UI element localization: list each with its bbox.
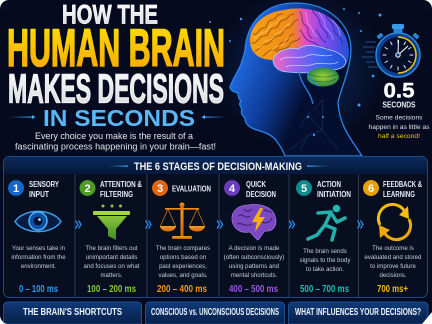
- stat note: happen in as little as: [368, 124, 430, 131]
- icon: brain with lightning bolt: [232, 204, 276, 240]
- stage 3: evaluation: [152, 180, 211, 295]
- stage 6: feedback and learning: evaluated and stored: [365, 254, 421, 261]
- stage 1: sensory input: SENSORY: [29, 179, 59, 189]
- stage 6: feedback and learning: LEARNING: [383, 189, 415, 199]
- brain temporal lobe: [273, 45, 346, 73]
- stage 2: attention and filtering: The brain filters out: [85, 245, 138, 252]
- stage 1: sensory input: environment.: [21, 263, 56, 270]
- stage 5: action initiation: 5: [301, 183, 307, 195]
- icon: funnel: [93, 204, 130, 240]
- stage 4: quick decision: (often subconsciously): [224, 254, 284, 261]
- stage 5: action initiation: 500 – 700 ms: [300, 284, 349, 295]
- title: [7, 0, 227, 131]
- stage 3: evaluation: options based on: [160, 254, 206, 261]
- stage 3: evaluation: The brain compares: [156, 245, 210, 252]
- panel heading: [4, 157, 427, 174]
- stat label: SECONDS: [382, 100, 416, 110]
- stage 4: quick decision: A decision is made: [229, 245, 280, 252]
- subtitle: Every choice you make is the result of a: [35, 131, 193, 141]
- stage 6: feedback and learning: 700 ms+: [377, 284, 408, 295]
- stage 4: quick decision: [224, 179, 284, 295]
- stage 3: evaluation: values, and goals.: [158, 272, 208, 279]
- arrows between stages: [76, 220, 363, 228]
- stage 2: attention and filtering: 100 – 200 ms: [87, 284, 136, 295]
- icon: cycle arrows: [378, 204, 411, 240]
- stage 2: attention and filtering: and focuses on what: [84, 263, 140, 270]
- brain cerebellum: [307, 68, 339, 86]
- network lines: [290, 100, 338, 150]
- stage 1: sensory input: 1: [13, 183, 19, 195]
- stage 6: feedback and learning: to improve future: [370, 263, 416, 270]
- stat note: Some decisions: [376, 114, 422, 122]
- icon: stopwatch: [362, 24, 420, 77]
- stat note: [368, 114, 430, 140]
- network dots: [209, 8, 382, 136]
- stage 4: quick decision: 400 – 500 ms: [229, 284, 278, 295]
- panel: conscious vs unconscious decisions: CONSCIOUS vs. UNCONSCIOUS DECISIONS: [151, 307, 279, 318]
- stage 2: attention and filtering: matters.: [100, 272, 123, 279]
- stage 3: evaluation: past experiences,: [159, 263, 207, 270]
- title line 3: MAKES DECISIONS: [8, 66, 224, 112]
- stage 6: feedback and learning: 6: [368, 183, 374, 195]
- stage 2: attention and filtering: [80, 179, 142, 295]
- stage 2: attention and filtering: unimportant details: [86, 254, 137, 261]
- stage 1: sensory input: Your senses take in: [12, 245, 65, 252]
- stage 3: evaluation: 200 – 400 ms: [157, 284, 207, 295]
- stage 5: action initiation: INITIATION: [317, 189, 351, 199]
- stage 5: action initiation: ACTION: [317, 179, 341, 189]
- panel: conscious vs unconscious decisions: [146, 302, 284, 324]
- stat value: 0.5: [384, 78, 415, 102]
- stage 1: sensory input: [8, 179, 66, 295]
- stage 1: sensory input: 0 – 100 ms: [19, 284, 58, 295]
- stage 6: feedback and learning: [363, 179, 422, 295]
- stage 2: attention and filtering: 2: [84, 183, 91, 195]
- stage 4: quick decision: mental shortcuts.: [231, 272, 278, 279]
- head silhouette: [230, 3, 362, 156]
- stage 5: action initiation: [296, 179, 351, 295]
- stage 3: evaluation: 3: [157, 183, 163, 195]
- subtitle: [15, 131, 216, 152]
- brain cerebrum: [250, 8, 349, 65]
- title line 4: IN SECONDS: [43, 105, 195, 131]
- title line 2: HUMAN BRAIN: [7, 19, 225, 78]
- stage 6: feedback and learning: The outcome is: [372, 245, 414, 252]
- brain folds on temporal lobe: [280, 55, 338, 67]
- panel heading: THE 6 STAGES OF DECISION-MAKING: [134, 161, 302, 173]
- brain stem: [299, 71, 320, 104]
- icon: balance scale: [160, 202, 205, 239]
- stage 4: quick decision: using patterns and: [229, 263, 279, 270]
- stage 4: quick decision: DECISION: [246, 189, 276, 199]
- stage 1: sensory input: INPUT: [29, 189, 50, 199]
- panel: the brain's shortcuts: [4, 302, 142, 324]
- icon: running figure: [308, 205, 345, 240]
- callout: 0.5 seconds stopwatch: [362, 24, 430, 140]
- stat note: half a second!: [378, 133, 420, 140]
- subtitle: fascinating process happening in your brain—fast!: [15, 142, 216, 152]
- frontal folds: [252, 14, 300, 56]
- parietal and occipital folds: [300, 9, 342, 48]
- panel: the brain's shortcuts: THE BRAIN'S SHORTCUTS: [23, 307, 122, 318]
- stage 2: attention and filtering: FILTERING: [100, 189, 133, 199]
- stage 5: action initiation: to take action.: [306, 266, 344, 273]
- stage 5: action initiation: The brain sends: [303, 248, 347, 255]
- stage 6: feedback and learning: decisions.: [379, 272, 407, 279]
- stage 4: quick decision: QUICK: [246, 179, 267, 189]
- stage 1: sensory input: information from the: [11, 254, 66, 261]
- panel: what influences your decisions: [288, 302, 428, 324]
- title line 1: HOW THE: [62, 0, 158, 30]
- icon: eye: [15, 211, 61, 232]
- stage 3: evaluation: EVALUATION: [172, 184, 211, 194]
- stage 4: quick decision: 4: [229, 183, 236, 195]
- stage 2: attention and filtering: ATTENTION &: [100, 179, 142, 189]
- stage 5: action initiation: signals to the body: [300, 257, 351, 264]
- panel: the 6 stages of decision-making: [4, 156, 428, 298]
- illustration: human head and brain: [209, 0, 385, 156]
